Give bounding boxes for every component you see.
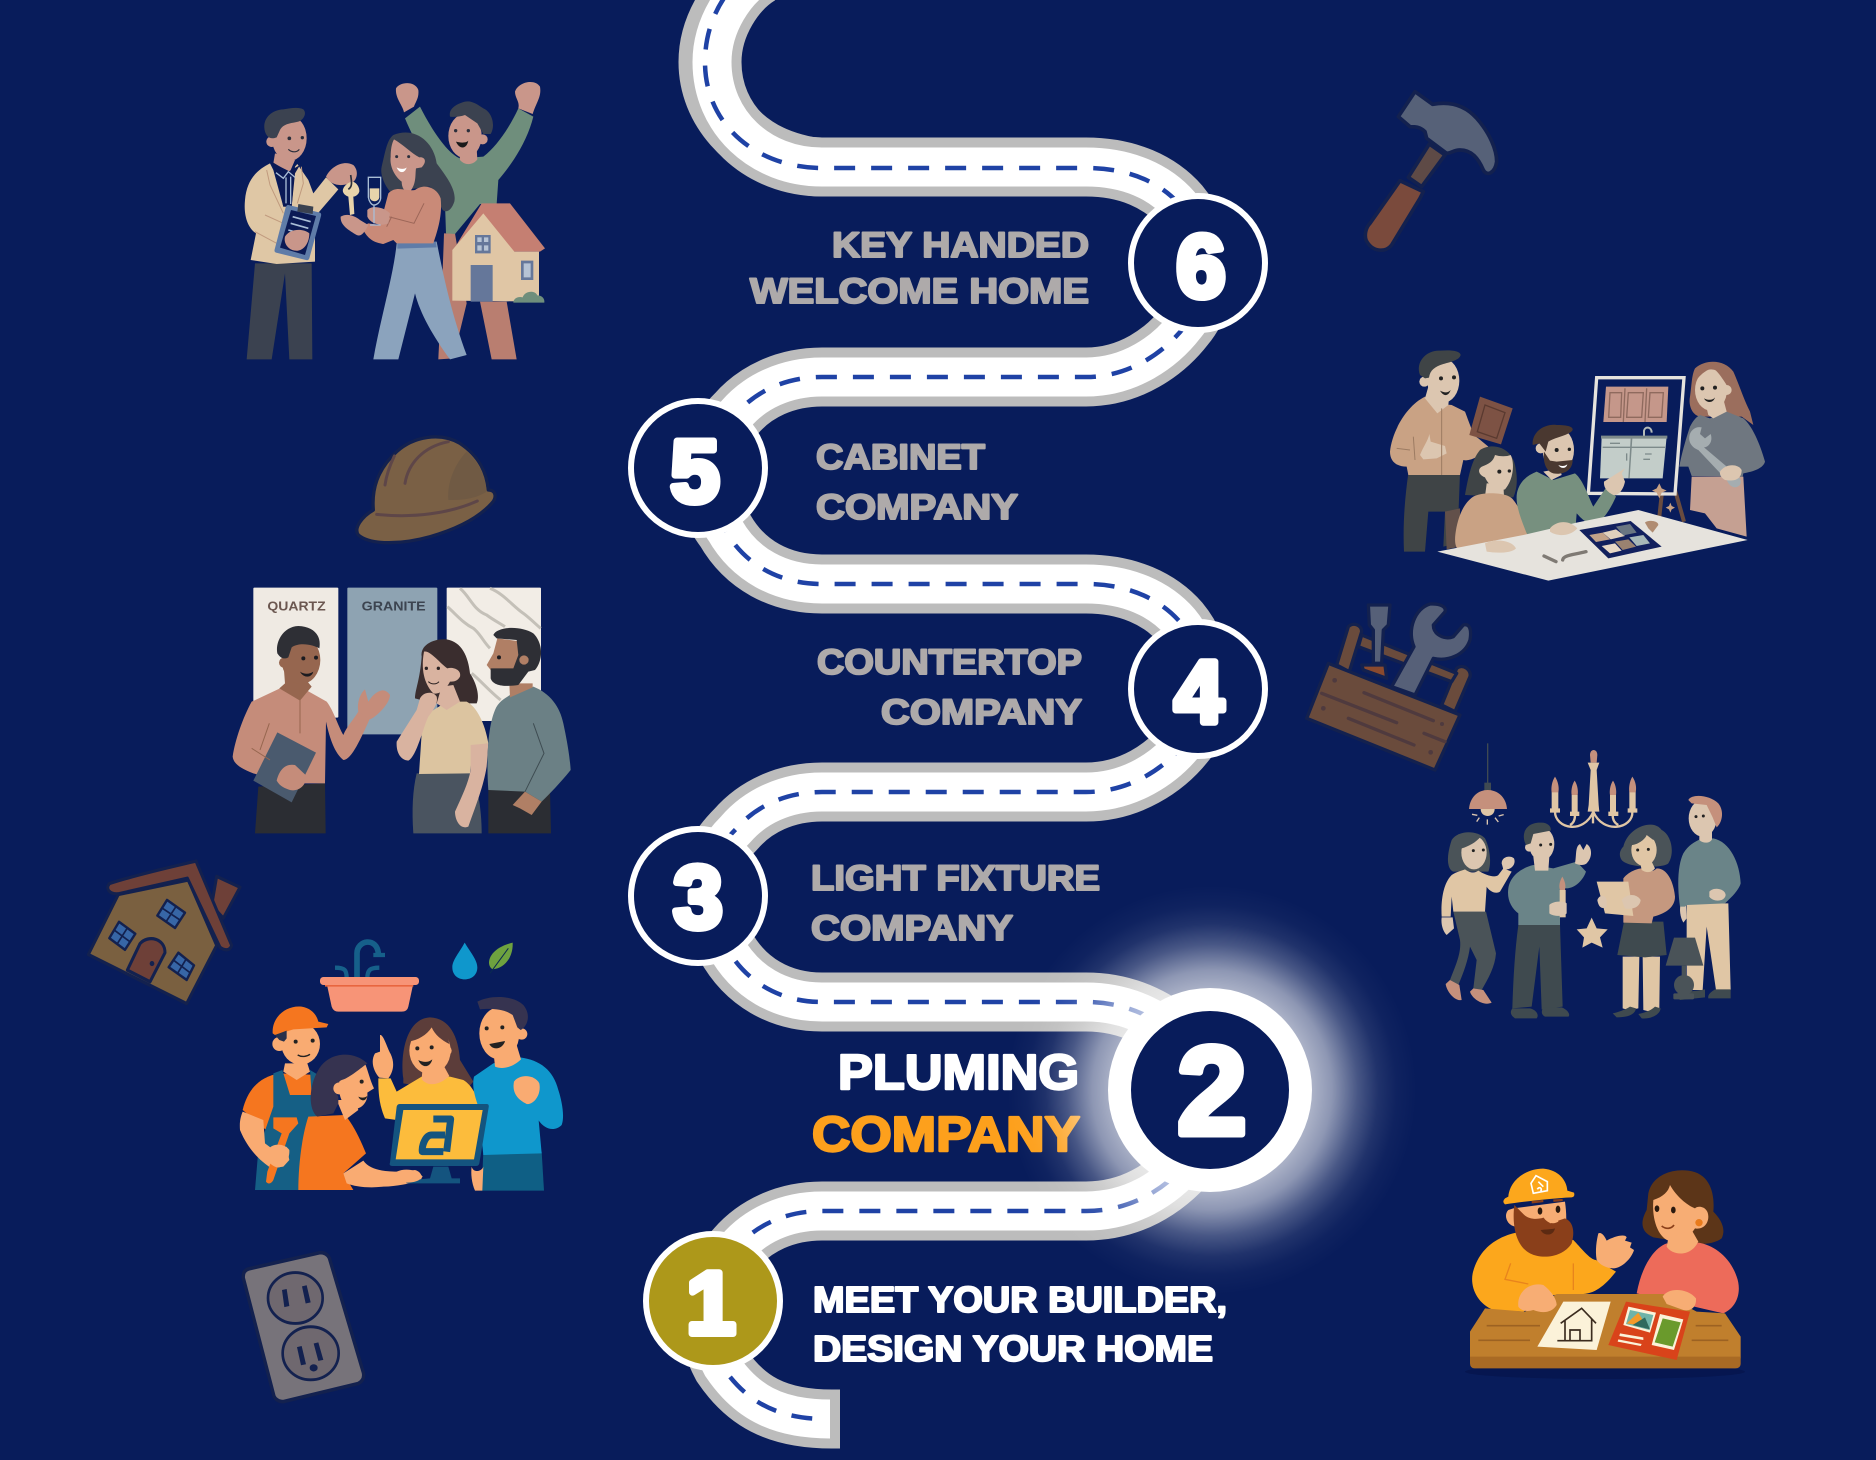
illustration: meeting the builder: [1465, 1169, 1745, 1379]
bearded man: [487, 628, 571, 833]
agent with keys: [245, 108, 359, 359]
step 3 label: COMPANY: [811, 909, 1013, 948]
step 2 badge: 2: [1177, 1022, 1247, 1161]
step 5 label: CABINET: [816, 438, 985, 477]
step 4 label: COUNTERTOP: [817, 643, 1082, 682]
step 3 label: LIGHT FIXTURE: [811, 859, 1100, 898]
step 1 badge: [646, 1234, 780, 1368]
step 5 badge: [631, 401, 765, 535]
homeowner woman: [341, 133, 467, 359]
step 4 badge: 4: [1175, 642, 1224, 742]
step 6 label: [750, 226, 1089, 311]
step 1 label: DESIGN YOUR HOME: [813, 1328, 1213, 1369]
builder: [1472, 1169, 1634, 1312]
step 6 badge: [1131, 196, 1265, 330]
step 3 label: [811, 859, 1100, 948]
stone sample panels: QUARTZ: [267, 600, 326, 614]
miniature house: [452, 203, 545, 303]
step 4 label: [817, 643, 1082, 732]
step 5 label: COMPANY: [816, 488, 1018, 527]
pendant lamp: [1469, 743, 1507, 825]
illustration: light fixture shopping: [1441, 743, 1741, 1018]
step 5 label: [816, 438, 1018, 527]
man presenting: [233, 626, 390, 833]
step 3 badge: 3: [674, 848, 722, 946]
step 2 badge: [1120, 1000, 1300, 1180]
seated bearded man: [1517, 425, 1625, 535]
winding road: [705, 0, 1209, 1419]
cabinet easel board: [1588, 378, 1684, 522]
step 2 label: [812, 1046, 1080, 1162]
water drop and leaf: [452, 943, 513, 979]
step 5 badge: 5: [671, 422, 719, 520]
step 6 label: WELCOME HOME: [750, 272, 1089, 311]
icon: tilted house: [88, 861, 240, 1004]
illustration: cabinet meeting: [1390, 350, 1765, 581]
computer monitor: [390, 1104, 489, 1183]
step 6 badge: 6: [1177, 216, 1225, 316]
star: [1577, 918, 1608, 948]
chandelier: [1550, 750, 1637, 827]
illustration: plumbing planning: [240, 942, 563, 1191]
step 6 label: KEY HANDED: [832, 226, 1089, 265]
stone sample panels: [253, 588, 541, 734]
stone sample panels: GRANITE: [362, 600, 426, 614]
woman client: [1637, 1170, 1739, 1313]
homeowner man: [396, 82, 540, 359]
table with samples: [1437, 510, 1748, 581]
step 4 badge: [1131, 622, 1265, 756]
icon: toolbox: [1307, 604, 1471, 770]
man with candle: [1508, 823, 1591, 1018]
man in blue: [471, 997, 563, 1191]
wooden table: [1470, 1284, 1741, 1368]
glow behind step 2: [1007, 885, 1417, 1295]
plumber: [240, 1007, 328, 1190]
step 1 label: MEET YOUR BUILDER,: [813, 1279, 1227, 1320]
chair and seated woman: [1445, 446, 1528, 553]
step 2 label: PLUMING: [838, 1046, 1079, 1100]
sink and faucet: [320, 942, 419, 1012]
illustration: key handover: [245, 82, 545, 359]
illustration: countertop selection: [233, 588, 571, 833]
step 2 label: COMPANY: [812, 1108, 1080, 1162]
table lamp: [1666, 938, 1703, 999]
step 1 badge: 1: [687, 1254, 735, 1352]
step 4 label: COMPANY: [881, 693, 1082, 732]
tall man: [1674, 796, 1741, 1000]
standing man with door sample: [1390, 350, 1513, 552]
step 3 badge: [631, 829, 765, 963]
woman in yellow: [373, 1017, 479, 1120]
table shadow: [1465, 1364, 1745, 1379]
icon: wall outlet: [243, 1253, 364, 1402]
icon: hard hat: [357, 437, 495, 543]
woman dancing: [1441, 832, 1515, 1004]
woman with list: [1597, 825, 1675, 1018]
standing woman with wrench: [1679, 362, 1765, 537]
woman in orange: [298, 1055, 422, 1190]
woman thinking: [397, 639, 488, 833]
icon: hammer: [1365, 92, 1497, 250]
step 1 label: [813, 1279, 1227, 1369]
sparkles: [1652, 483, 1675, 513]
